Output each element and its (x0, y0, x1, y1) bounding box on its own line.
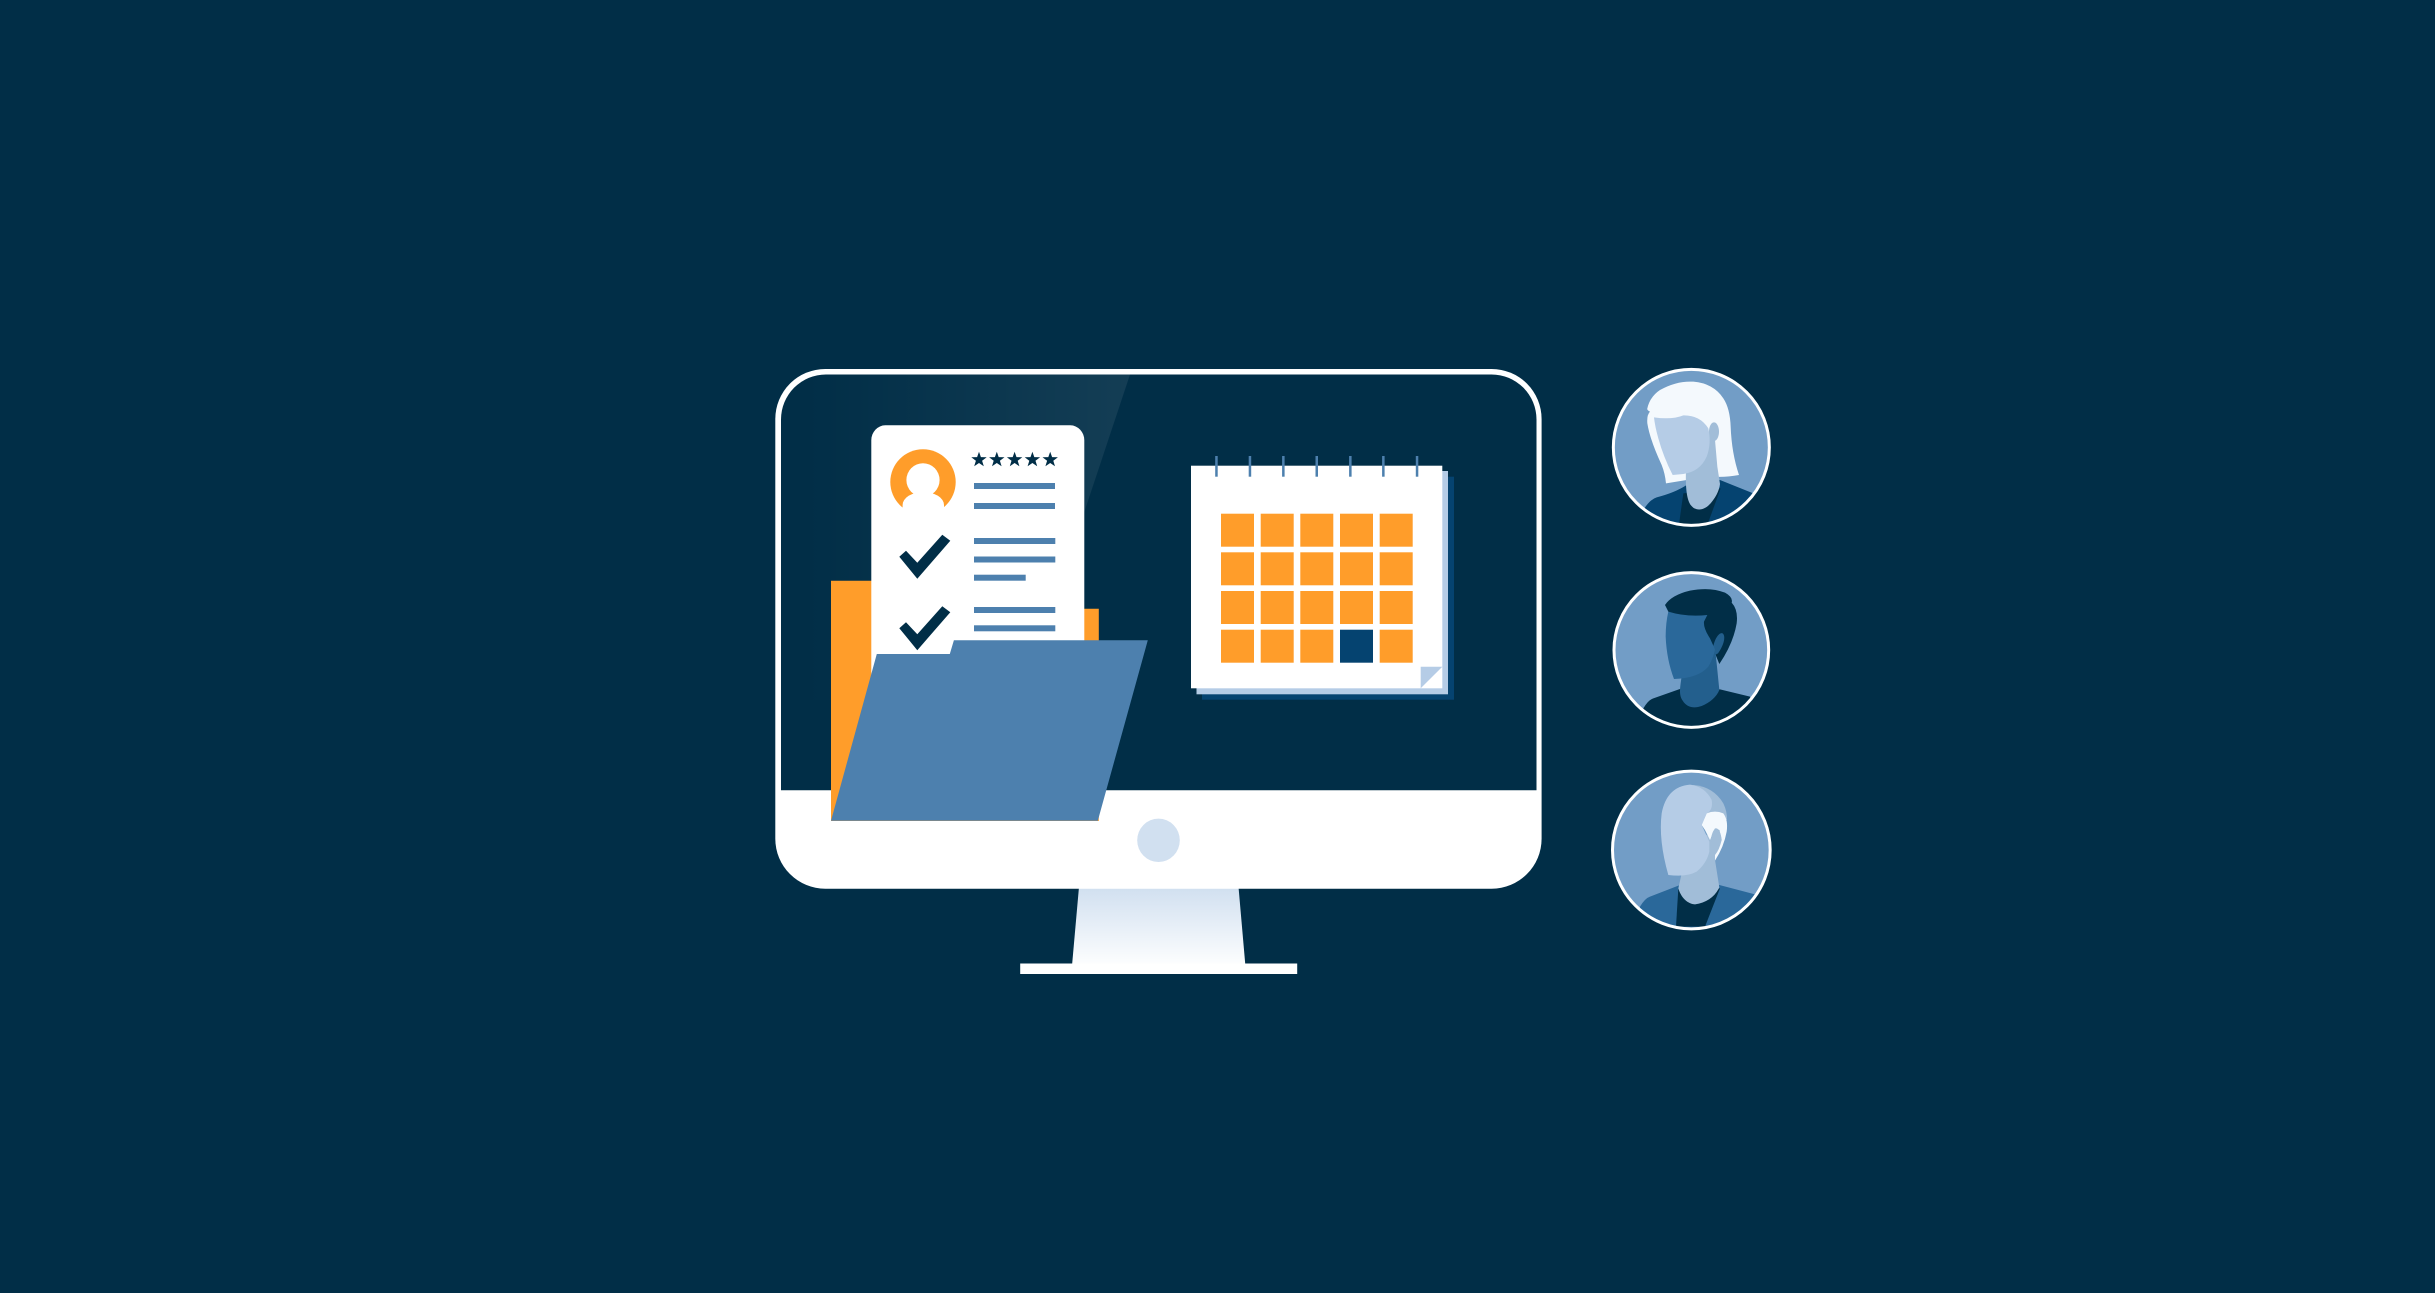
avatar: woman with white hair (1613, 369, 1769, 533)
ear (1711, 828, 1722, 855)
calendar page curl (1421, 667, 1442, 688)
calendar page (1191, 466, 1442, 688)
neck and ear (1686, 432, 1720, 510)
folder front (831, 640, 1148, 821)
calendar date grid (1221, 514, 1413, 663)
neck (1680, 652, 1720, 708)
monitor stand (1072, 888, 1245, 964)
power button (1137, 819, 1180, 862)
monitor screen (781, 374, 1536, 790)
neck (1678, 827, 1719, 904)
folder with resume (831, 425, 1148, 821)
check mark two (899, 606, 950, 650)
five star rating (971, 452, 1058, 466)
calendar bottom layer (1202, 477, 1454, 700)
shirt (1640, 885, 1755, 928)
folder back (831, 581, 1099, 821)
face (1666, 612, 1715, 679)
hair (1665, 589, 1737, 664)
monitor body (775, 369, 1542, 889)
hair (1647, 382, 1739, 483)
resume text lines (974, 483, 1055, 631)
white hair (1702, 812, 1727, 861)
monitor stand base (1020, 964, 1297, 974)
shirt (1644, 480, 1752, 523)
resume sheet (871, 425, 1084, 760)
ear (1713, 633, 1724, 655)
calendar (1191, 456, 1454, 700)
avatar: man with dark hair (1614, 573, 1769, 733)
back of head (1693, 785, 1727, 827)
profile avatar icon (890, 449, 956, 515)
face (1661, 785, 1712, 876)
screen light beam (800, 374, 1130, 700)
face (1654, 415, 1710, 475)
calendar middle layer (1196, 471, 1448, 694)
avatar: bald man with white sideburn (1612, 771, 1770, 933)
check mark one (899, 535, 950, 579)
shirt (1643, 689, 1750, 726)
calendar spiral rings (1215, 456, 1418, 477)
computer monitor (775, 369, 1542, 974)
